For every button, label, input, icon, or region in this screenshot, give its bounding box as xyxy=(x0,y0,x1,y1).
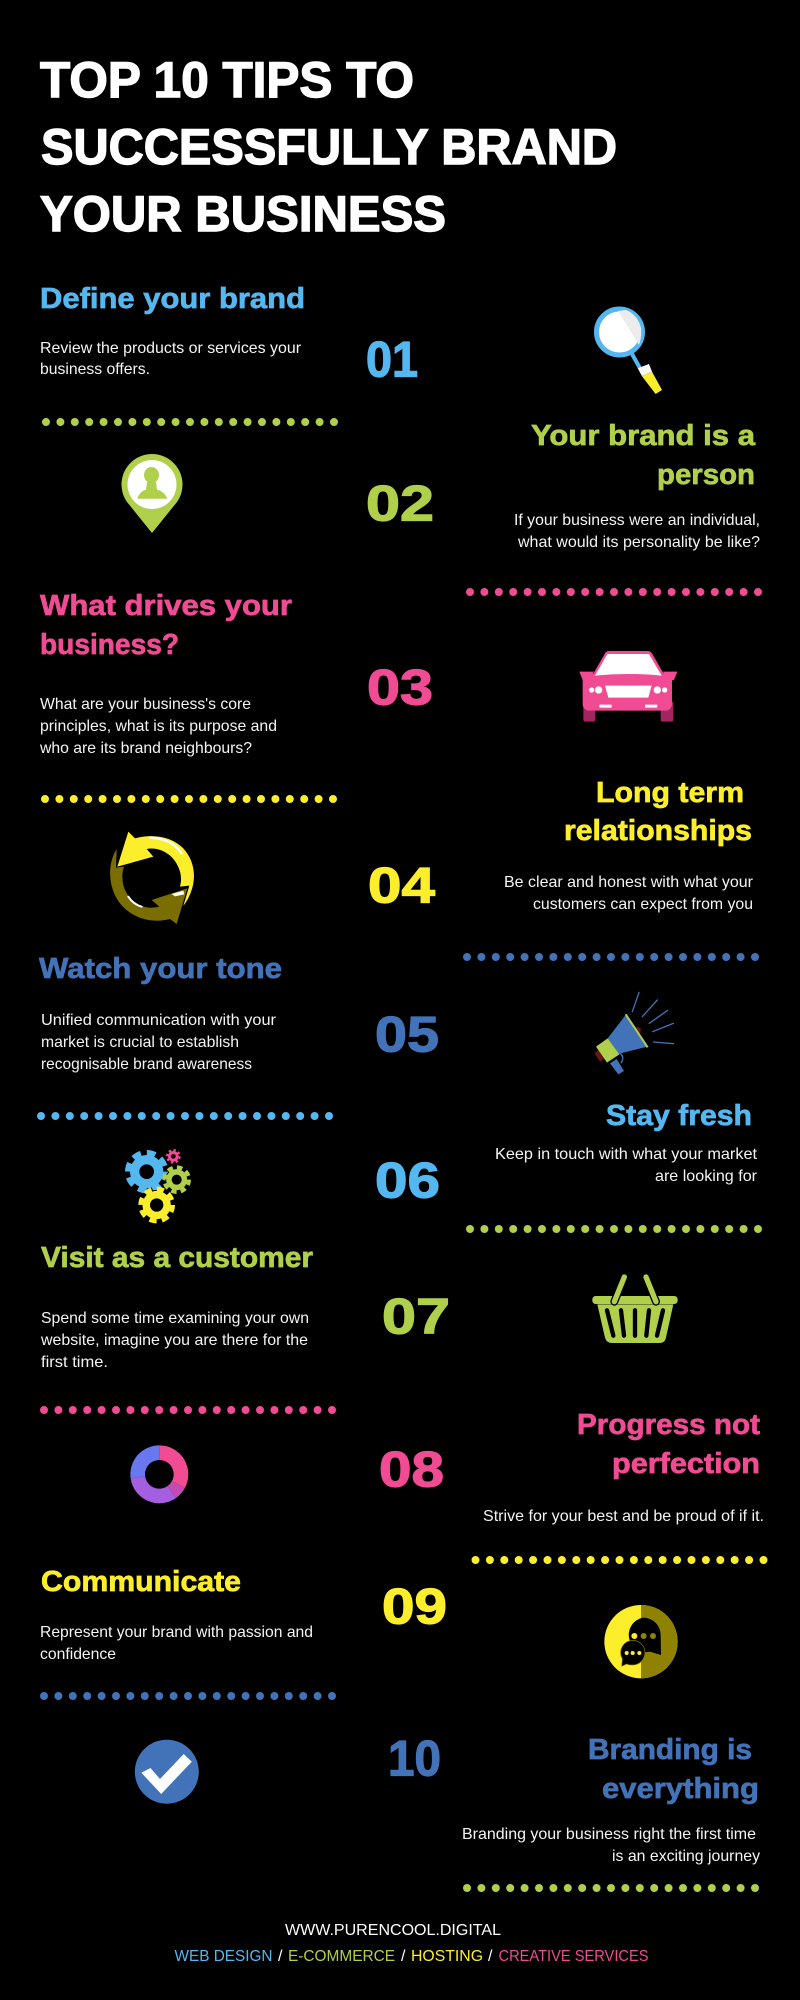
icon: location pin with person xyxy=(122,454,182,533)
body text: what would its personality be like? xyxy=(517,534,760,551)
body text xyxy=(462,1826,760,1865)
panel: tip 03 what drives your business xyxy=(39,590,677,757)
title: YOUR BUSINESS xyxy=(40,186,446,242)
heading: everything xyxy=(602,1773,759,1805)
heading: Progress not xyxy=(577,1409,760,1441)
panel: tip 08 progress not perfection xyxy=(130,1409,764,1525)
body text: Spend some time examining your own xyxy=(41,1310,309,1327)
heading: person xyxy=(657,459,755,491)
number: 09 xyxy=(382,1578,447,1634)
body text: Branding your business right the first time xyxy=(462,1826,756,1843)
panel: tip 09 communicate xyxy=(40,1566,678,1678)
footer services line: WEB DESIGN xyxy=(174,1948,272,1965)
body text: market is crucial to establish xyxy=(41,1034,239,1051)
panel: tip 10 branding is everything xyxy=(135,1730,760,1865)
body text: business offers. xyxy=(40,361,150,378)
body text: Be clear and honest with what your xyxy=(504,874,754,891)
heading: What drives your xyxy=(40,590,292,622)
icon: shopping basket xyxy=(592,1277,678,1343)
title: SUCCESSFULLY BRAND xyxy=(41,119,617,175)
heading xyxy=(531,420,756,491)
title xyxy=(40,52,617,242)
heading xyxy=(564,777,752,847)
number: 04 xyxy=(368,858,435,914)
footer services line: E-COMMERCE xyxy=(288,1948,395,1965)
heading: relationships xyxy=(564,815,752,847)
icon: magnifying glass xyxy=(596,309,662,394)
body text: first time. xyxy=(41,1354,108,1371)
panel: tip 01 define your brand xyxy=(40,283,662,394)
body text: who are its brand neighbours? xyxy=(39,740,252,757)
icon: megaphone xyxy=(594,992,674,1074)
heading: Your brand is a xyxy=(531,420,756,452)
body text: website, imagine you are there for the xyxy=(40,1332,308,1349)
icon: chat bubbles xyxy=(604,1605,678,1678)
number: 05 xyxy=(375,1006,439,1062)
heading: Long term xyxy=(596,777,744,809)
body text: Review the products or services your xyxy=(40,340,302,357)
body text: If your business were an individual, xyxy=(514,512,760,529)
body text xyxy=(41,1012,277,1073)
body text: customers can expect from you xyxy=(533,896,753,913)
number: 01 xyxy=(366,332,418,388)
footer services line: / xyxy=(278,1948,283,1965)
icon: gears xyxy=(128,1150,189,1221)
body text: are looking for xyxy=(655,1168,758,1185)
body text xyxy=(514,512,760,551)
panel: tip 04 long term relationships xyxy=(110,777,754,924)
body text: Strive for your best and be proud of if it. xyxy=(483,1508,764,1525)
body text xyxy=(504,874,754,913)
body text: What are your business's core xyxy=(40,696,251,713)
heading: Stay fresh xyxy=(606,1100,752,1132)
body text xyxy=(39,696,277,757)
body text xyxy=(495,1146,758,1185)
body text: Represent your brand with passion and xyxy=(40,1624,313,1641)
panel: tip 07 visit as a customer xyxy=(40,1242,678,1371)
body text: recognisable brand awareness xyxy=(41,1056,252,1073)
footer services line xyxy=(174,1948,648,1965)
heading xyxy=(577,1409,760,1480)
body text: principles, what is its purpose and xyxy=(40,718,277,735)
heading: Watch your tone xyxy=(39,953,282,985)
footer services line: / xyxy=(401,1948,406,1965)
heading xyxy=(588,1734,759,1805)
number: 06 xyxy=(375,1152,440,1208)
body text: is an exciting journey xyxy=(612,1848,760,1865)
number: 03 xyxy=(367,660,433,716)
body text xyxy=(40,1624,313,1663)
panel: tip 06 stay fresh xyxy=(128,1100,758,1221)
icon: check mark xyxy=(135,1740,199,1804)
number: 07 xyxy=(382,1288,450,1344)
title: TOP 10 TIPS TO xyxy=(40,52,414,108)
panel: tip 05 watch your tone xyxy=(39,953,674,1074)
body text xyxy=(40,340,302,378)
heading: Branding is xyxy=(588,1734,752,1766)
body text: confidence xyxy=(40,1646,116,1663)
panel: tip 02 your brand is a person xyxy=(122,420,760,551)
footer services line: / xyxy=(488,1948,493,1965)
footer services line: CREATIVE SERVICES xyxy=(498,1948,648,1965)
number: 08 xyxy=(379,1442,444,1498)
icon: car xyxy=(579,651,677,722)
body text: Keep in touch with what your market xyxy=(495,1146,758,1163)
heading: perfection xyxy=(612,1448,760,1480)
heading: Communicate xyxy=(41,1566,241,1598)
number: 10 xyxy=(388,1730,441,1786)
heading xyxy=(40,590,292,661)
heading: business? xyxy=(40,629,179,661)
icon: donut chart xyxy=(130,1445,188,1503)
heading: Visit as a customer xyxy=(41,1242,313,1274)
icon: circular arrows xyxy=(110,832,194,924)
body text: Unified communication with your xyxy=(41,1012,277,1029)
number: 02 xyxy=(366,476,434,532)
footer services line: HOSTING xyxy=(411,1948,483,1965)
heading: Define your brand xyxy=(40,283,305,315)
body text xyxy=(40,1310,309,1371)
footer website: WWW.PURENCOOL.DIGITAL xyxy=(285,1922,501,1939)
